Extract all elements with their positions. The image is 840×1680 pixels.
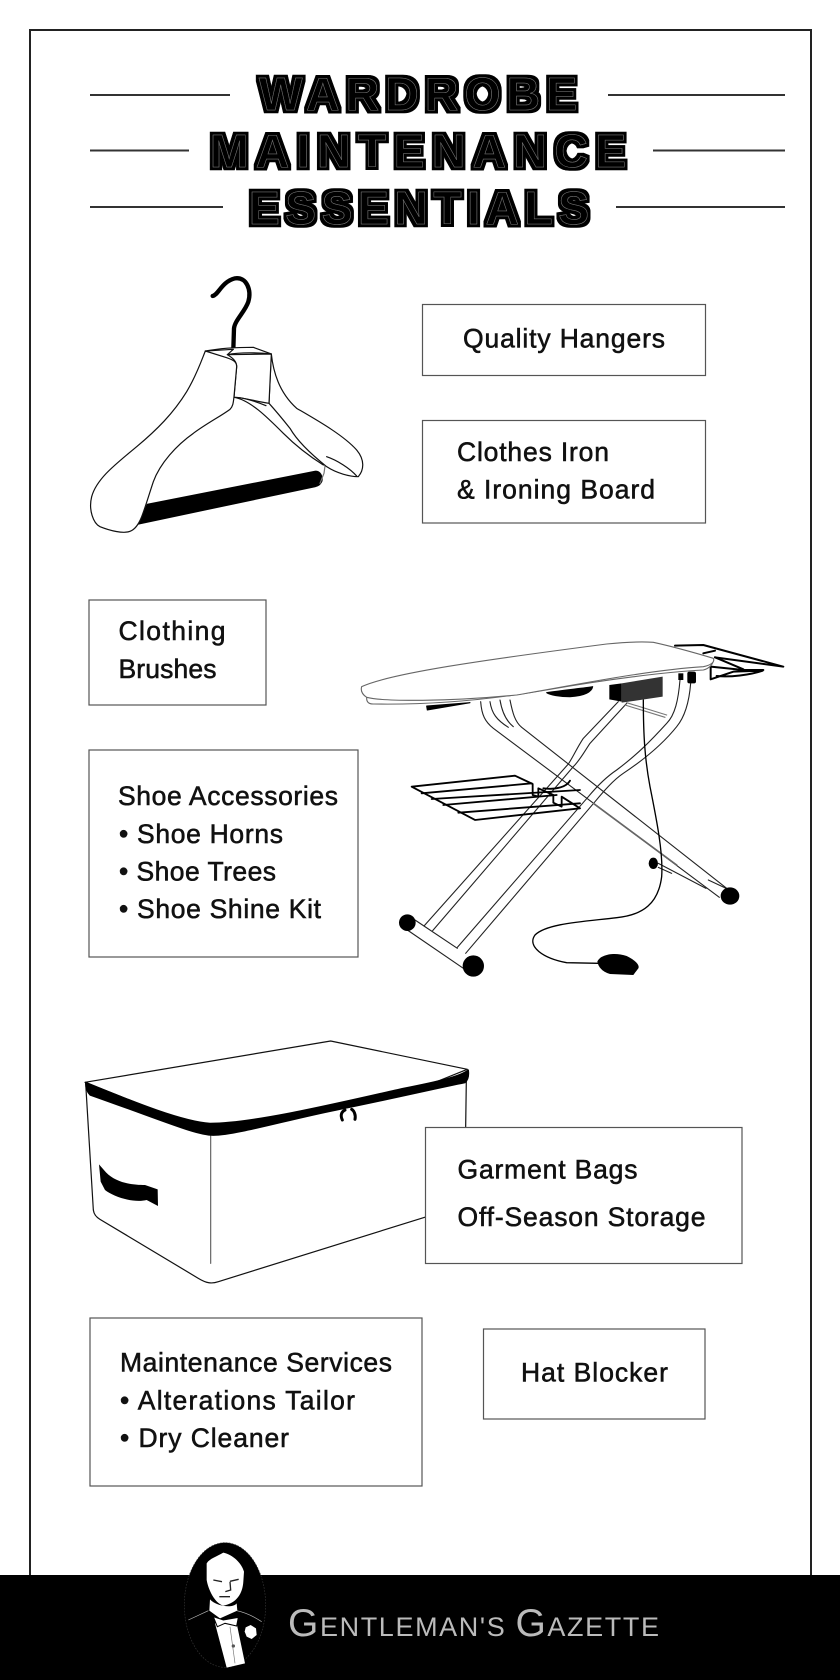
- box: maintenance services: • Dry Cleaner: [120, 1423, 289, 1453]
- box: clothing brushes: Brushes: [118, 654, 216, 684]
- box: hat blocker: Hat Blocker: [521, 1358, 668, 1388]
- box: quality hangers: [422, 304, 706, 376]
- box: shoe accessories: Shoe Accessories: [118, 781, 338, 811]
- box: clothing brushes: Clothing: [118, 616, 226, 646]
- box: maintenance services: • Alterations Tailor: [120, 1386, 355, 1416]
- right-hand iron rest: [675, 645, 783, 679]
- title: [90, 68, 785, 234]
- icon: storage box: [85, 1041, 469, 1283]
- box: quality hangers: Quality Hangers: [463, 324, 665, 354]
- title: WARDROBE: [259, 68, 577, 120]
- icon: hanger: [91, 278, 363, 532]
- box: garment bags and off-season storage: [426, 1128, 742, 1264]
- footer band: [0, 1575, 840, 1680]
- box: hat blocker: [484, 1329, 705, 1419]
- icon: ironing board: [361, 642, 783, 977]
- box: shoe accessories: [89, 750, 358, 957]
- box: clothes iron and ironing board: Clothes Iron: [457, 437, 609, 467]
- title: MAINTENANCE: [210, 125, 626, 177]
- box: maintenance services: Maintenance Services: [120, 1348, 392, 1378]
- power cord: [533, 700, 662, 963]
- logo: wordmark: GENTLEMAN'S GAZETTE: [288, 1602, 659, 1645]
- box: garment bags and off-season storage: Off-Season Storage: [458, 1202, 706, 1232]
- board top: [367, 660, 713, 704]
- box: shoe accessories: • Shoe Horns: [119, 819, 283, 849]
- base rod: [407, 920, 463, 968]
- box: clothes iron and ironing board: & Ironing Board: [457, 474, 655, 504]
- legs: [481, 702, 719, 897]
- logo: portrait: [184, 1543, 266, 1668]
- box: maintenance services: [90, 1318, 422, 1486]
- box: garment bags and off-season storage: Garment Bags: [458, 1154, 638, 1184]
- title: ESSENTIALS: [249, 182, 589, 234]
- box: clothes iron and ironing board: [422, 420, 706, 523]
- wire shelf: [412, 776, 580, 820]
- box: shoe accessories: • Shoe Shine Kit: [119, 894, 322, 924]
- box: shoe accessories: • Shoe Trees: [119, 856, 276, 886]
- foot pedal: [597, 954, 639, 975]
- box: clothing brushes: [89, 600, 266, 705]
- feet: [399, 914, 416, 931]
- control box: [609, 683, 622, 702]
